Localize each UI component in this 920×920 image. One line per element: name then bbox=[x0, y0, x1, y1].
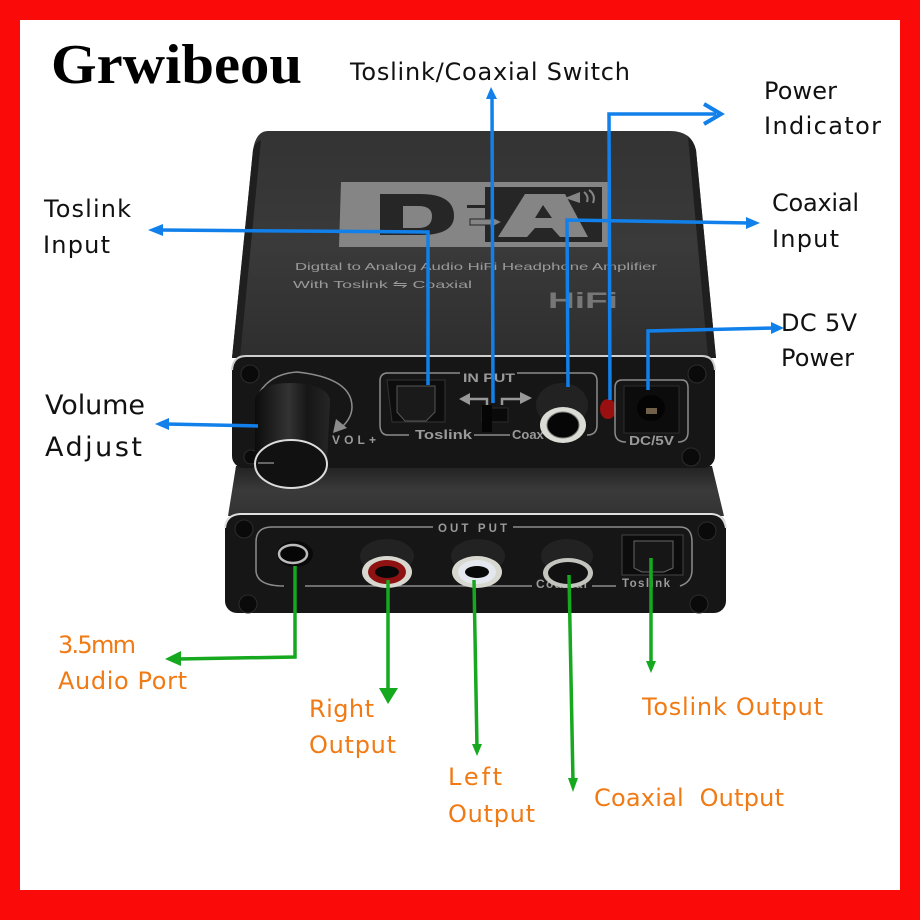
input panel: IN PUT bbox=[463, 371, 516, 385]
VOL label: VOL+ bbox=[332, 433, 376, 447]
label: Volume Adjust: Adjust bbox=[45, 432, 142, 463]
label: Toslink Input bbox=[43, 195, 131, 259]
arrow: volume adjust bbox=[155, 418, 258, 430]
label: Left Output: Output bbox=[448, 800, 535, 828]
output outline bbox=[256, 527, 692, 586]
label: Volume Adjust bbox=[45, 390, 145, 463]
label: Coaxial Input bbox=[772, 189, 859, 253]
label: Right Output: Output bbox=[309, 731, 396, 759]
label: Toslink/Coaxial Switch: Toslink/Coaxial Switch bbox=[349, 58, 630, 86]
label: 3.5mm Audio Port: 3.5mm bbox=[58, 631, 136, 659]
label: Toslink Output: Toslink Output bbox=[641, 693, 823, 721]
arrow: toslink/coaxial switch bbox=[486, 87, 497, 403]
left RCA bbox=[451, 539, 505, 573]
volume knob bbox=[255, 383, 330, 488]
device: DAC unit: HiFi bbox=[548, 288, 618, 313]
output panel: Toslink bbox=[622, 578, 671, 590]
label: DC 5V Power: Power bbox=[781, 344, 854, 372]
output panel: OUT PUT bbox=[438, 523, 507, 535]
arrow: coaxial input bbox=[567, 217, 760, 387]
label: Right Output bbox=[309, 695, 396, 759]
arrow: coaxial output bbox=[568, 575, 578, 792]
label: Power Indicator: Indicator bbox=[764, 112, 881, 140]
title: Grwibeou bbox=[51, 34, 302, 96]
lower panel screws bbox=[235, 520, 716, 613]
logo: D to A bbox=[339, 182, 609, 247]
arrow: right output bbox=[379, 580, 398, 704]
label: Volume Adjust: Volume bbox=[45, 390, 145, 421]
input panel: Toslink bbox=[415, 427, 473, 442]
blue callout arrows bbox=[148, 87, 784, 430]
label: Left Output: Left bbox=[448, 763, 502, 791]
label: Coaxial Input: Coaxial bbox=[772, 189, 859, 217]
input outline bbox=[380, 373, 597, 435]
DC panel bbox=[615, 380, 688, 442]
label: Right Output: Right bbox=[309, 695, 374, 723]
label: Toslink Input: Input bbox=[43, 231, 110, 259]
green callout arrows bbox=[165, 558, 656, 792]
slide switch bbox=[482, 408, 508, 422]
label: Coaxial Input: Input bbox=[772, 225, 839, 253]
label: Power Indicator bbox=[764, 77, 881, 140]
arrow: 3.5mm port bbox=[165, 566, 295, 666]
label: 3.5mm Audio Port bbox=[58, 631, 187, 695]
device top cover bbox=[232, 131, 716, 358]
arrow: power indicator bbox=[609, 104, 721, 400]
input panel: DC/5V bbox=[629, 433, 674, 448]
label: Power Indicator: Power bbox=[764, 77, 837, 105]
toslink output bbox=[622, 535, 683, 575]
label: DC 5V Power bbox=[781, 309, 858, 372]
arrow: DC power bbox=[648, 322, 784, 390]
toslink input port bbox=[387, 380, 445, 422]
arrow: toslink input bbox=[148, 224, 428, 385]
input panel: Coax bbox=[512, 427, 545, 442]
coaxial RCA bbox=[541, 539, 593, 573]
device printed text: Digttal to Analog Audio HiFi Headphone Amplifier bbox=[295, 261, 658, 273]
label: 3.5mm Audio Port: Audio Port bbox=[58, 667, 187, 695]
output panel: Coaxial bbox=[536, 577, 587, 591]
3.5mm jack bbox=[277, 541, 313, 567]
arrow: left output bbox=[472, 580, 482, 756]
input panel bbox=[232, 356, 715, 488]
device: DAC unit: With Toslink ⇋ Coaxial bbox=[293, 279, 472, 291]
label: Coaxial Output: Coaxial Output bbox=[594, 784, 784, 812]
switch arrows bbox=[466, 399, 520, 405]
volume arc bbox=[257, 372, 352, 431]
label: Toslink Input: Toslink bbox=[43, 195, 131, 223]
right RCA bbox=[360, 539, 414, 573]
label: DC 5V Power: DC 5V bbox=[781, 309, 858, 337]
panel screws bbox=[241, 365, 706, 466]
coaxial input jack bbox=[536, 383, 588, 427]
arrow: toslink output bbox=[646, 558, 656, 673]
output panel bbox=[225, 514, 726, 613]
device: DAC unit bbox=[225, 131, 726, 613]
lower unit body bbox=[228, 466, 724, 516]
label: Left Output bbox=[448, 763, 535, 828]
power LED bbox=[600, 399, 616, 419]
